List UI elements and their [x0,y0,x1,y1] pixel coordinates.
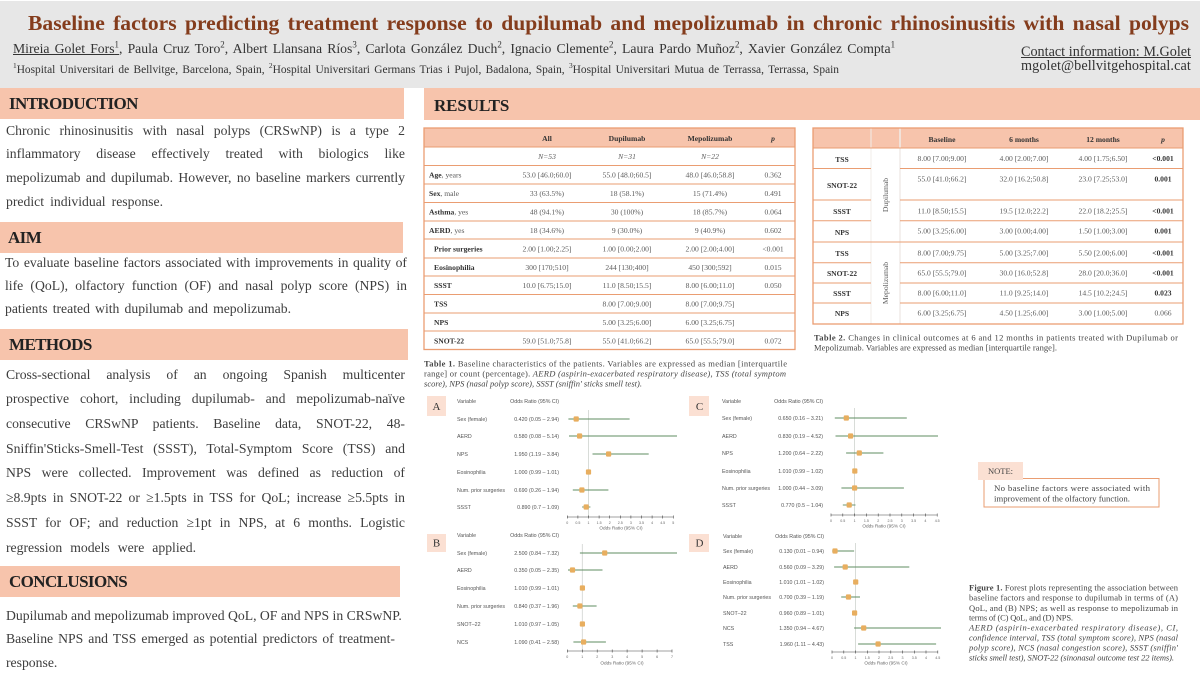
heading: results: RESULTS [434,96,509,115]
table 2: changes in clinical outcomes: 65.0 [55.5;79.0] [918,268,966,278]
forest plot A: Eosinophilia [457,470,486,476]
forest plot C: 1.000 (0.44 – 3.09) [778,486,823,492]
table 1: baseline characteristics: All [542,134,552,143]
table 1 caption: score), NPS (nasal polyp score), SSST (sniffin' sticks smell test). [424,378,642,388]
forest plot B: 0.840 (0.37 – 1.96) [514,604,559,610]
forest plot D: 4.5 [935,656,940,660]
methods body text: NPS were collected. Improvement was defined as reduction of [6,465,405,480]
heading: aim: AIM [8,228,41,247]
table 2: changes in clinical outcomes: Dupilumab [881,178,890,212]
table 2 caption: Table 2. Changes in clinical outcomes at 6 and 12 months in patients treated with Dupilumab or [814,332,1178,342]
forest plot A: 1 [588,521,590,525]
forest plot A: 4.5 [660,521,665,525]
forest plot B: 6 [656,655,658,659]
forest plot A: Variable [457,399,476,405]
table 1: baseline characteristics: 2.00 [1.00;2.25] [523,244,571,254]
table 1: baseline characteristics: NPS [434,318,448,327]
forest plot D: SNOT–22 [723,611,747,617]
forest plot A: 2 [609,521,611,525]
forest plot B: Variable [457,533,476,539]
forest plot B: 2.500 (0.84 – 7.32) [514,551,559,557]
table 1: baseline characteristics: 55.0 [48.0;60.5] [603,170,651,180]
forest plot D: NCS [723,626,735,632]
header band [0,1,1200,88]
forest plot D: 3 [902,656,904,660]
forest plot A [427,396,677,530]
table 1: baseline characteristics: Sex, male [429,189,460,198]
panel label A: A [433,401,441,413]
table 2: changes in clinical outcomes: 3.00 [1.00;5.00] [1079,308,1127,318]
table 1: baseline characteristics: 0.602 [764,226,782,235]
forest plot D: 1.350 (0.94 – 4.67) [779,626,824,632]
table 1 caption: Table 1. Baseline characteristics of the patients. Variables are expressed as median [interquartile [424,358,787,368]
panel label B: B [433,538,440,550]
forest plot C: 4.5 [935,519,940,523]
introduction body text: mepolizumab and dupilumab. However, no baseline markers currently [6,170,405,185]
table 2 caption: Mepolizumab. Variables are expressed as median [interquartile range]. [814,342,1057,352]
forest plot B: Num. prior surgeries [457,604,505,610]
conclusions body text: Baseline NPS and TSS emerged as potential predictors of treatment- [6,631,395,646]
forest plot D: 0.130 (0.01 – 0.94) [779,549,824,555]
figure 1 caption: QoL, and (B) NPS; as well as response to mepolizumab in [969,603,1179,613]
forest plot C [689,396,940,528]
note callout: NOTE: [988,466,1013,476]
forest plot D: AERD [723,565,738,571]
conclusions body text [6,608,402,670]
forest plot C: SSST [722,503,737,509]
table 1: baseline characteristics: 0.050 [764,281,782,290]
contact information: Contact information: M.Golet [1021,44,1191,60]
forest plot D: 0 [831,656,833,660]
table 2: changes in clinical outcomes: SNOT-22 [827,181,857,190]
forest plot C: Eosinophilia [722,469,751,475]
figure 1 caption [968,582,1179,662]
table 1: baseline characteristics: 5.00 [3.25;6.00] [603,318,651,327]
table 2: changes in clinical outcomes: NPS [835,309,849,318]
forest plot D: TSS [723,642,734,648]
table 1: baseline characteristics: Asthma, yes [429,208,468,216]
forest plot B [427,533,677,666]
table 2: changes in clinical outcomes: <0.001 [1152,248,1174,258]
affiliations: 1Hospital Universitari de Bellvitge, Barcelona, Spain, 2Hospital Universitari Germans Trias i Pujol, Badalona, Spain, 3Hospital Universitari Mutua de Terrassa, Terrassa, Spain [13,61,839,76]
forest plot D: 2.5 [888,656,893,660]
table 1: baseline characteristics: 59.0 [51.0;75.8] [523,336,571,346]
table 2: changes in clinical outcomes: 5.00 [3.25;6.00] [918,226,966,236]
table 2: changes in clinical outcomes: 1.50 [1.00;3.00] [1079,226,1127,236]
forest plot C: 0.650 (0.16 – 3.21) [778,416,823,422]
panel label D [689,534,709,552]
forest plot B: 5 [641,655,643,659]
panel label C [689,396,709,416]
introduction body text: Chronic rhinosinusitis with nasal polyps (CRSwNP) is a type 2 [6,123,405,138]
table 2: changes in clinical outcomes: 32.0 [16.2;50.8] [1000,174,1048,184]
table 2: changes in clinical outcomes: 0.023 [1154,288,1172,298]
forest plot B: 0.350 (0.05 – 2.35) [514,568,559,574]
introduction body text: predict individual response. [6,194,163,209]
heading: introduction [0,88,404,119]
table 1: baseline characteristics: 18 (85.7%) [693,208,728,216]
forest plot D: 0.700 (0.39 – 1.19) [779,595,824,601]
panel: conclusions [0,566,402,670]
table 1: baseline characteristics: Prior surgeries [434,244,483,254]
forest plot D: Sex (female) [723,549,753,555]
table 1: baseline characteristics: 8.00 [7.00;9.75] [686,300,734,308]
forest plot D: 1.5 [865,656,870,660]
forest plot B: 1.090 (0.41 – 2.58) [514,640,559,646]
forest plot C: 0 [830,519,832,523]
forest plot B: SNOT–22 [457,622,481,628]
forest plot B: 1.010 (0.97 – 1.05) [514,622,559,628]
table 1: baseline characteristics: 0.491 [764,189,782,198]
forest plot A: NPS [457,452,468,458]
forest plot C: Variable [722,399,741,405]
forest plot D: 1 [854,656,856,660]
forest plot D: Odds Ratio (95% CI) [775,534,824,540]
forest plot A: 0.890 (0.7 – 1.09) [517,505,559,511]
table 1: baseline characteristics: N=53 [537,152,556,161]
table 2: changes in clinical outcomes: 6 months [1009,135,1039,144]
forest plot D: Variable [723,534,742,540]
panel: aim [0,222,407,316]
forest plot D: 2 [878,656,880,660]
table 1: baseline characteristics: 2.00 [2.00;4.00] [686,244,734,254]
table 1: baseline characteristics: 11.0 [8.50;15.5] [603,281,651,290]
forest plot C: 2 [877,519,879,523]
forest plot A: 4 [651,521,653,525]
forest plot D [689,534,941,666]
table 1: baseline characteristics: <0.001 [762,244,784,254]
heading: results [424,88,1200,120]
forest plot D: 1.010 (1.01 – 1.02) [779,580,824,586]
table 2: changes in clinical outcomes: <0.001 [1152,268,1174,278]
panel label B [427,534,446,552]
table 1: baseline characteristics: 0.362 [764,170,782,180]
forest plot D: Eosinophilia [723,580,752,586]
forest plot C: Sex (female) [722,416,752,422]
forest plot D: 1.960 (1.11 – 4.43) [780,642,824,648]
table 1 caption: range] or count (percentage). AERD (aspirin-exacerbated respiratory disease), TSS (total symptom [424,368,786,378]
table 2: changes in clinical outcomes: 14.5 [10.2;24.5] [1079,288,1127,298]
forest plot C: 0.830 (0.19 – 4.52) [778,434,823,440]
forest plot B: Eosinophilia [457,586,486,592]
forest plot A: 1.000 (0.99 – 1.01) [514,470,559,476]
heading: methods [0,329,408,360]
forest plot A: Odds Ratio (95% CI) [510,399,559,405]
table 1: baseline characteristics: N=31 [617,152,636,161]
forest plot B: Sex (female) [457,551,487,557]
forest plot D: 0.560 (0.09 – 3.29) [779,565,824,571]
forest plot B: 0 [566,655,568,659]
forest plot D: 0.5 [841,656,846,660]
table 2: changes in clinical outcomes: 4.00 [2.00;7.00] [1000,154,1048,163]
forest plot C: 1.010 (0.99 – 1.02) [778,469,823,475]
table 1: baseline characteristics: 0.072 [764,336,782,346]
forest plot A: 0.580 (0.08 – 5.14) [514,434,559,440]
methods body text: prospective cohort, including dupilumab- and mepolizumab-naïve [6,391,405,406]
forest plot B: 1 [581,655,583,659]
table 2: changes in clinical outcomes: Baseline [928,135,956,144]
forest plot C: 1 [854,519,856,523]
authors: Mireia Golet Fors1, Paula Cruz Toro2, Albert Llansana Ríos3, Carlota González Duch2, Ignacio Clemente2, Laura Pardo Muñoz2, Xavier González Compta1 [13,39,895,56]
methods body text: consecutive CRSwNP patients. Baseline data, SNOT-22, 48- [6,416,405,431]
aim body text [5,255,407,316]
forest plot C: Odds Ratio (95% CI) [774,399,823,405]
note callout [978,462,1159,507]
table 1: baseline characteristics [424,128,795,350]
methods body text [6,367,405,555]
forest plot C: 0.770 (0.5 – 1.04) [781,503,823,509]
table 2: changes in clinical outcomes: 8.00 [7.00;9.00] [918,154,966,163]
table 1: baseline characteristics: 244 [130;400] [605,263,649,272]
forest plot A: 0.690 (0.26 – 1.94) [514,488,559,494]
table 1: baseline characteristics: 6.00 [3.25;6.75] [686,318,734,327]
table 1: baseline characteristics: 18 (34.6%) [530,226,565,235]
table 2: changes in clinical outcomes: 4.00 [1.75;6.50] [1079,154,1127,163]
forest plot A: Odds Ratio (95% CI) [599,526,643,530]
table 1: baseline characteristics: AERD, yes [429,226,464,235]
table 1: baseline characteristics: SSST [434,281,452,290]
table 2: changes in clinical outcomes: SSST [833,289,851,298]
table 1: baseline characteristics: 0.015 [764,263,782,272]
heading: aim [0,222,403,253]
forest plot B: 7 [671,655,673,659]
forest plot B: 4 [626,655,628,659]
table 2: changes in clinical outcomes: TSS [835,249,849,258]
forest plot A: 1.950 (1.19 – 3.84) [514,452,559,458]
heading: conclusions: CONCLUSIONS [9,572,127,591]
forest plot C: 1.5 [864,519,869,523]
table 2: changes in clinical outcomes: SNOT-22 [827,269,857,278]
forest plot C: 0.5 [840,519,845,523]
table 2 caption [814,332,1178,352]
table 2: changes in clinical outcomes: 11.0 [8.50;15.5] [918,206,966,216]
forest plot B: AERD [457,568,472,574]
table 1: baseline characteristics: Age, years [429,170,462,180]
table 2: changes in clinical outcomes: 4.50 [1.25;6.00] [1000,308,1048,318]
forest plot C: 3.5 [911,519,916,523]
forest plot D: 4 [925,656,927,660]
forest plot A: 3 [630,521,632,525]
table 2: changes in clinical outcomes: SSST [833,207,851,216]
forest plot A: 2.5 [618,521,623,525]
table 1: baseline characteristics: 10.0 [6.75;15.0] [523,281,571,290]
table 2: changes in clinical outcomes: 5.00 [3.25;7.00] [1000,248,1048,258]
table 1: baseline characteristics: 300 [170;510] [525,263,569,272]
panel label A [427,396,446,416]
forest plot A: 0.5 [575,521,580,525]
table 2: changes in clinical outcomes: 19.5 [12.0;22.2] [1000,206,1048,216]
forest plot D: 0.960 (0.89 – 1.01) [779,611,824,617]
table 2: changes in clinical outcomes: p [1160,135,1165,144]
figure 1 caption: baseline factors and response to dupilumab in terms of (A) [969,592,1178,602]
table 1: baseline characteristics: 18 (58.1%) [610,189,645,198]
contact information: mgolet@bellvitgehospital.cat [1021,58,1191,74]
table 1: baseline characteristics: 30 (100%) [611,208,644,216]
table 2: changes in clinical outcomes: 3.00 [0.00;4.00] [1000,226,1048,236]
heading: introduction: INTRODUCTION [9,94,138,113]
table 1: baseline characteristics: 8.00 [6.00;11.0] [686,281,734,290]
methods body text: regression models were applied. [6,540,196,555]
forest plot A: 1.5 [597,521,602,525]
table 1: baseline characteristics: 9 (40.9%) [695,226,726,235]
table 1: baseline characteristics: 55.0 [41.0;66.2] [603,336,651,346]
forest plot C: AERD [722,434,737,440]
methods body text: ≥8.9pts in SNOT-22 or ≥1.5pts in TSS for QoL; increase ≥5.5pts in [6,490,405,505]
forest plot A: Sex (female) [457,417,487,423]
table 1: baseline characteristics: 1.00 [0.00;2.00] [603,244,651,254]
table 2: changes in clinical outcomes: 0.066 [1154,308,1172,318]
table 2: changes in clinical outcomes: <0.001 [1152,206,1174,216]
forest plot A: SSST [457,505,472,511]
table 1: baseline characteristics: 9 (30.0%) [612,226,643,235]
table 1: baseline characteristics: 65.0 [55.5;79.0] [686,336,734,346]
table 2: changes in clinical outcomes: 23.0 [7.25;53.0] [1079,174,1127,184]
table 2: changes in clinical outcomes: Mepolizumab [881,262,890,304]
forest plot A: Num. prior surgeries [457,488,505,494]
heading: conclusions [0,566,400,597]
forest plot B: 2 [596,655,598,659]
introduction body text: inflammatory disease effectively treated with biologics like [6,146,405,161]
table 2: changes in clinical outcomes: 8.00 [7.00;9.75] [918,248,966,258]
table 1: baseline characteristics: Mepolizumab [688,134,732,143]
contact information [1021,44,1191,74]
table 1: baseline characteristics: Dupilumab [609,134,645,143]
forest plot C: Odds Ratio (95% CI) [862,524,906,528]
table 2: changes in clinical outcomes: 30.0 [16.0;52.8] [1000,268,1048,278]
table 2: changes in clinical outcomes: 0.001 [1154,226,1172,236]
table 1 caption [424,358,787,388]
table 1: baseline characteristics: 33 (63.5%) [530,189,565,198]
table 1: baseline characteristics: 450 [300;592] [688,263,732,272]
forest plot D: Odds Ratio (95% CI) [864,660,908,666]
forest plot D: Num. prior surgeries [723,595,771,601]
aim body text: To evaluate baseline factors associated with improvements in quality of [5,255,407,270]
conclusions body text: response. [6,655,57,670]
conclusions body text: Dupilumab and mepolizumab improved QoL, OF and NPS in CRSwNP. [6,608,402,623]
forest plot C: Num. prior surgeries [722,486,770,492]
forest plot A: 5 [672,521,674,525]
methods body text: SSST for OF; and reduction ≥1pt in NPS, at 6 months. Logistic [6,515,405,530]
table 2: changes in clinical outcomes: 6.00 [3.25;6.75] [918,308,966,318]
forest plot B: 3 [611,655,613,659]
panel: introduction [0,88,405,209]
table 2: changes in clinical outcomes: 28.0 [20.0;36.0] [1079,268,1127,278]
table 2: changes in clinical outcomes: <0.001 [1152,154,1174,163]
table 2: changes in clinical outcomes: 11.0 [9.25;14.0] [1000,288,1048,298]
table 2: changes in clinical outcomes: 5.50 [2.00;6.00] [1079,248,1127,258]
figure 1 caption: polyp score), NCS (nasal congestion score), SSST (sniffin' [968,642,1178,652]
panel label C: C [696,401,703,413]
table 1: baseline characteristics: 15 (71.4%) [693,189,728,198]
table 1: baseline characteristics: 53.0 [46.0;60.0] [523,170,571,180]
table 2: changes in clinical outcomes: TSS [835,155,849,164]
forest plot B: Odds Ratio (95% CI) [510,533,559,539]
figure 1 caption: terms of (C) QoL, and (D) NPS. [969,612,1073,622]
forest plot B: Odds Ratio (95% CI) [600,660,644,666]
figure 1 caption: AERD (aspirin-exacerbated respiratory disease), CI, [968,622,1178,632]
panel: methods [0,329,408,555]
figure 1 caption: sticks smell test), SNOT-22 (sinonasal outcome test 22 items). [969,652,1174,662]
table 1: baseline characteristics: TSS [434,300,448,308]
heading: methods: METHODS [9,335,92,354]
aim body text: life (QoL), olfactory function (OF) and nasal polyp score (NPS) in [5,278,407,293]
table 1: baseline characteristics: 0.064 [764,208,782,216]
panel label D: D [696,538,704,550]
introduction body text [6,123,405,209]
table 1: baseline characteristics: 8.00 [7.00;9.00] [603,300,651,308]
figure 1 caption: Figure 1. Forest plots representing the association between [969,582,1179,592]
forest plot C: NPS [722,451,733,457]
note callout: improvement of the olfactory function. [994,494,1130,504]
forest plot A: 3.5 [639,521,644,525]
forest plot A: 0 [566,521,568,525]
table 2: changes in clinical outcomes [813,128,1183,324]
note callout: No baseline factors were associated with [994,483,1151,493]
forest plot C: 2.5 [888,519,892,523]
forest plot B: 1.010 (0.99 – 1.01) [514,586,559,592]
table 1: baseline characteristics: 48 (94.1%) [530,208,565,216]
table 1: baseline characteristics: SNOT-22 [434,336,464,346]
forest plot C: 3 [901,519,903,523]
table 2: changes in clinical outcomes: NPS [835,228,849,237]
forest plot B: NCS [457,640,469,646]
table 1: baseline characteristics: Eosinophilia [434,263,475,272]
table 2: changes in clinical outcomes: 0.001 [1154,174,1172,184]
table 2: changes in clinical outcomes: 22.0 [18.2;25.5] [1079,206,1127,216]
table 1: baseline characteristics: 48.0 [46.0;58.8] [686,170,734,180]
methods body text: Sniffin'Sticks-Smell-Test (SSST), Total-Symptom Score (TSS) and [6,441,405,456]
table 1: baseline characteristics: p [770,134,775,143]
figure 1 caption: confidence interval, TSS (total symptom score), NPS (nasal [969,632,1179,642]
forest plot C: 1.200 (0.64 – 2.22) [778,451,823,457]
table 2: changes in clinical outcomes: 55.0 [41.0;66.2] [918,174,966,184]
aim body text: patients treated with dupilumab and mepolizumab. [5,301,291,316]
title: Baseline factors predicting treatment response to dupilumab and mepolizumab in chronic rhinosinusitis with nasal polyps [28,11,1189,35]
table 1: baseline characteristics: N=22 [700,152,719,161]
forest plot A: 0.420 (0.05 – 2.94) [514,417,559,423]
forest plot A: AERD [457,434,472,440]
methods body text: Cross-sectional analysis of an ongoing Spanish multicenter [6,367,405,382]
forest plot C: 4 [924,519,926,523]
table 2: changes in clinical outcomes: 12 months [1086,135,1120,144]
table 2: changes in clinical outcomes: 8.00 [6.00;11.0] [918,288,966,298]
forest plot D: 3.5 [912,656,917,660]
